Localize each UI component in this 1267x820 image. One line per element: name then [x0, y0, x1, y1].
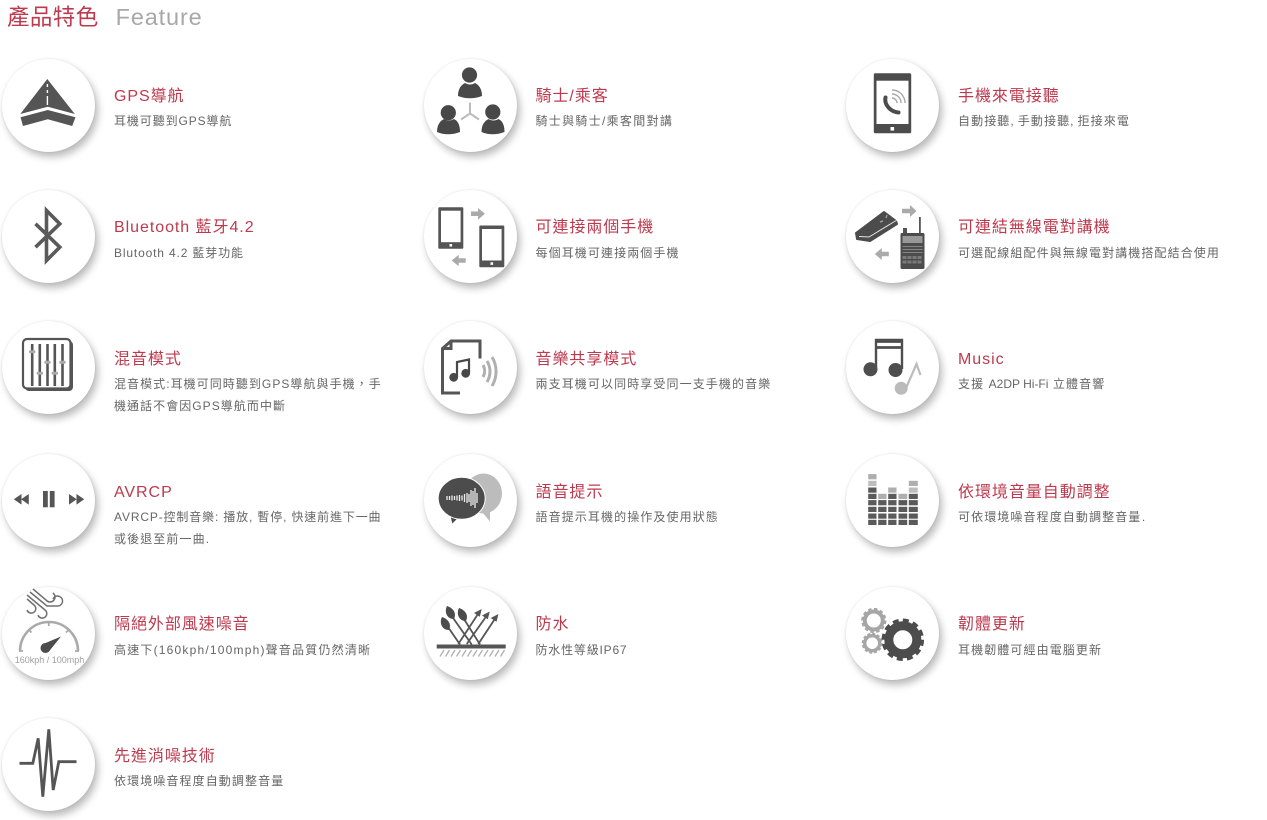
heading: 可連接兩個手機	[536, 219, 654, 236]
description	[114, 510, 381, 546]
description	[114, 377, 382, 413]
description: 機通話不會因GPS導航而中斷	[114, 399, 286, 413]
description: Blutooth 4.2 藍芽功能	[114, 246, 244, 260]
icon: shared music file	[420, 317, 520, 417]
panel: music	[844, 320, 1105, 423]
description: 語音提示耳機的操作及使用狀態	[536, 510, 719, 524]
icon: wind and speedometer: 160kph / 100mph	[14, 654, 84, 664]
panel: noise cancellation	[0, 717, 284, 820]
heading: 音樂共享模式	[536, 350, 637, 368]
panel: audio multitasking	[0, 320, 382, 423]
icon: Bluetooth	[0, 186, 98, 286]
panel: rider and passenger	[422, 58, 673, 161]
heading: 韌體更新	[958, 616, 1026, 633]
icon: equalizer	[842, 450, 942, 550]
icon: speech bubbles	[420, 450, 520, 550]
panel: GPS navigation	[0, 58, 232, 161]
panel: connect two phones	[422, 189, 680, 292]
panel: music sharing	[422, 320, 771, 423]
description: 兩支耳機可以同時享受同一支手機的音樂	[536, 377, 771, 391]
icon: water repelling surface	[420, 584, 520, 684]
heading: 先進消噪技術	[114, 748, 216, 764]
heading: Bluetooth 藍牙4.2	[114, 219, 255, 236]
title: 產品特色 Feature	[7, 4, 203, 30]
panel: voice prompts	[422, 453, 719, 556]
description: 自動接聽, 手動接聽, 拒接來電	[958, 114, 1130, 128]
heading: AVRCP	[114, 484, 173, 500]
description: 高速下(160kph/100mph)聲音品質仍然清晰	[114, 642, 371, 656]
description: 可選配線組配件與無線電對講機搭配結合使用	[958, 246, 1220, 260]
description: 混音模式:耳機可同時聽到GPS導航與手機，手	[114, 377, 382, 391]
heading: 依環境音量自動調整	[958, 484, 1111, 500]
icon: phone call	[842, 55, 942, 155]
heading: 手機來電接聽	[958, 88, 1060, 104]
panel: AVRCP	[0, 453, 381, 556]
description: 或後退至前一曲.	[114, 532, 210, 546]
icon: three riders	[420, 55, 520, 155]
description: 依環境噪音程度自動調整音量	[114, 774, 284, 788]
panel: incoming call	[844, 58, 1130, 161]
description: 耳機可聽到GPS導航	[114, 114, 232, 128]
panel: wind noise isolation	[0, 586, 371, 689]
icon: headset module and radio	[842, 186, 942, 286]
heading: GPS導航	[114, 88, 185, 104]
description: AVRCP-控制音樂: 播放, 暫停, 快速前進下一曲	[114, 510, 381, 524]
icon: two phones	[420, 186, 520, 286]
description: 騎士與騎士/乘客間對講	[536, 114, 673, 128]
heading: 可連結無線電對講機	[958, 219, 1111, 236]
heading: 防水	[536, 616, 569, 633]
heading: 隔絕外部風速噪音	[114, 616, 250, 633]
description: 可依環境噪音程度自動調整音量 .	[958, 510, 1146, 524]
panel: waterproof	[422, 586, 627, 689]
icon: playback controls	[0, 450, 98, 550]
description: 每個耳機可連接兩個手機	[536, 246, 680, 260]
description: 支援 A2DP Hi-Fi 立體音響	[958, 377, 1105, 391]
panel: Bluetooth	[0, 189, 255, 292]
icon: mixer	[0, 317, 98, 417]
description: 耳機韌體可經由電腦更新	[958, 642, 1102, 656]
panel: firmware update	[844, 586, 1102, 689]
icon: wind and speedometer	[0, 584, 98, 684]
heading: 語音提示	[536, 484, 603, 500]
heading: 騎士/乘客	[536, 88, 609, 104]
heading: Music	[958, 350, 1005, 368]
icon: GPS road	[0, 55, 98, 155]
heading: 混音模式	[114, 350, 182, 368]
panel: two-way radio	[844, 189, 1220, 292]
icon: sound pulse	[0, 714, 98, 814]
description: 防水性等級IP67	[536, 642, 627, 656]
icon: gears	[842, 584, 942, 684]
icon: music notes	[842, 317, 942, 417]
panel: auto volume	[844, 453, 1146, 556]
